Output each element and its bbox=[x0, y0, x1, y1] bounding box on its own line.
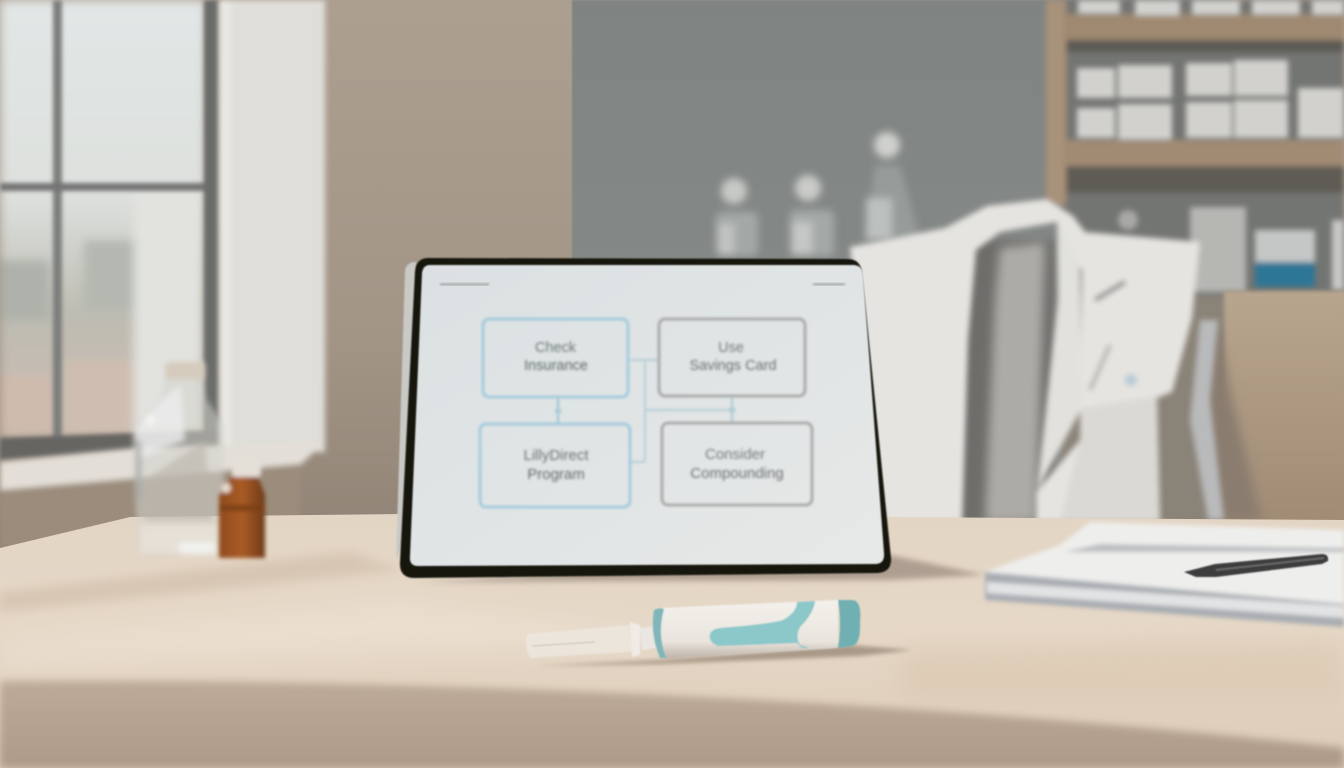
tablet bezel bbox=[400, 258, 891, 578]
papers and folder bbox=[985, 522, 1344, 627]
box: Use Savings Card: Savings Card bbox=[689, 358, 777, 374]
tablet screen bbox=[410, 265, 884, 566]
screen header marks bbox=[440, 283, 845, 286]
box: Check Insurance: Insurance bbox=[524, 358, 588, 374]
box: Use Savings Card bbox=[659, 319, 805, 396]
shelf containers bbox=[1077, 0, 1344, 292]
window frame bbox=[0, 0, 220, 460]
box: Check Insurance: Check bbox=[535, 340, 577, 356]
pen body bbox=[653, 600, 860, 659]
injector pen bbox=[526, 600, 860, 659]
box: LillyDirect Program: Program bbox=[527, 466, 585, 483]
box: Check Insurance bbox=[483, 319, 628, 397]
window reveal bbox=[0, 0, 325, 548]
box: LillyDirect Program bbox=[480, 424, 630, 507]
box: Consider Compounding bbox=[662, 423, 812, 505]
window bbox=[0, 0, 206, 438]
box: Consider Compounding: Consider bbox=[705, 446, 765, 463]
pen on papers bbox=[1184, 554, 1328, 577]
tablet shadow bbox=[420, 555, 985, 582]
shelving unit bbox=[1046, 0, 1344, 295]
clear needle cap bbox=[526, 622, 657, 658]
flowchart connectors bbox=[556, 360, 734, 462]
background glass bottles bbox=[716, 132, 920, 256]
pen shadow on table bbox=[535, 645, 912, 666]
clear glass bottle bbox=[132, 362, 224, 555]
box: Use Savings Card: Use bbox=[718, 340, 744, 356]
box: Consider Compounding: Compounding bbox=[690, 465, 784, 482]
background wall bbox=[0, 0, 1260, 560]
tablet bbox=[396, 258, 891, 578]
lab coat on chair bbox=[850, 199, 1262, 522]
cabinet bbox=[1224, 291, 1344, 523]
box: LillyDirect Program: LillyDirect bbox=[523, 447, 589, 464]
amber bottle bbox=[219, 459, 265, 558]
table top bbox=[0, 514, 1344, 768]
tablet casing bbox=[396, 262, 420, 560]
